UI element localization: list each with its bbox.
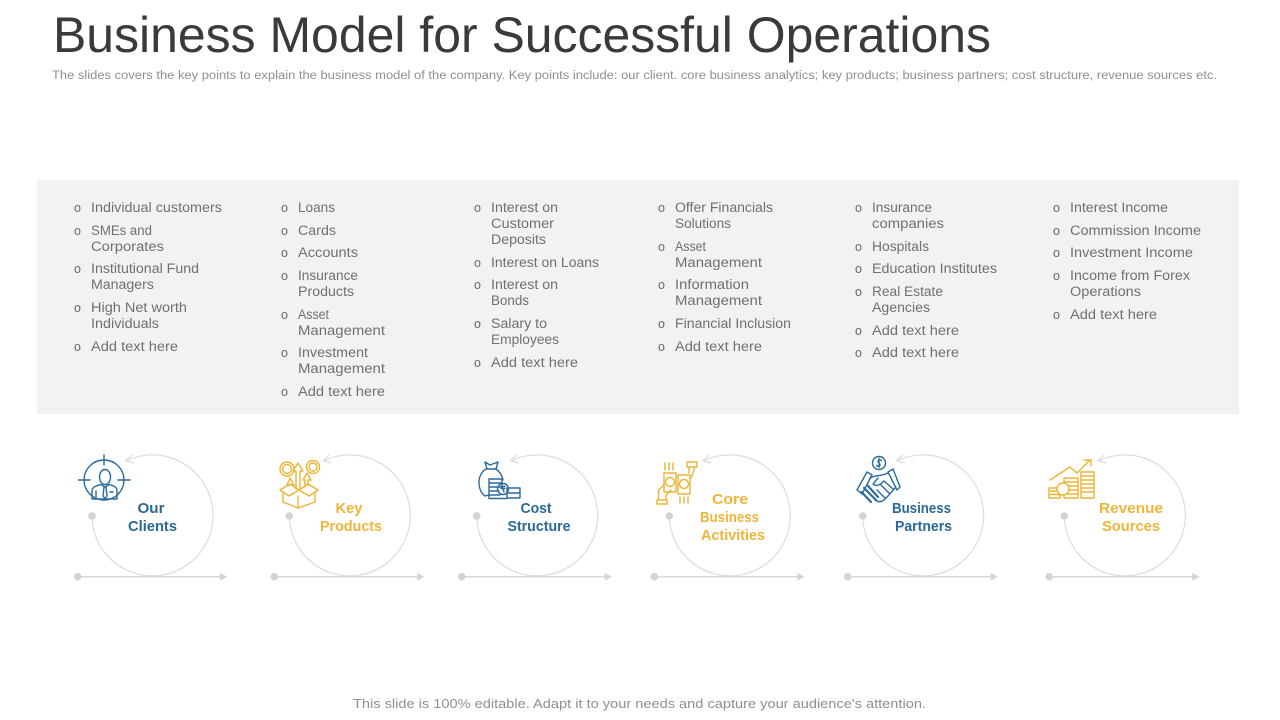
list: our clients: [74, 200, 222, 354]
label: Sources: [1102, 518, 1160, 535]
list: key products: Insurance: [298, 268, 358, 283]
list: core business activities: Management: [675, 255, 762, 270]
list: cost structure: Employees: [491, 332, 559, 347]
list: business partners: o: [855, 262, 862, 276]
list: business partners: Add text here: [872, 323, 959, 338]
list: our clients: Corporates: [91, 239, 164, 254]
list: core business activities: o: [658, 317, 665, 331]
list: key products: o: [281, 308, 288, 322]
list: our clients: SMEs and: [91, 223, 152, 238]
list: business partners: Insurance: [872, 200, 932, 215]
label: Products: [320, 518, 382, 535]
label: Clients: [128, 518, 177, 535]
list: cost structure: [474, 200, 599, 370]
list: our clients: Individual customers: [91, 200, 222, 215]
list: key products: Cards: [298, 223, 336, 238]
list: cost structure: Bonds: [491, 293, 529, 308]
list: core business activities: Information: [675, 277, 749, 292]
icon: exchange hands: [657, 462, 697, 504]
list: key products: o: [281, 246, 288, 260]
list: our clients: o: [74, 340, 81, 354]
list: revenue sources: o: [1053, 224, 1060, 238]
label: [1099, 500, 1163, 535]
step: key products: [270, 455, 424, 581]
list: core business activities: o: [658, 340, 665, 354]
list: cost structure: Add text here: [491, 355, 578, 370]
list: key products: Management: [298, 361, 385, 376]
list: business partners: o: [855, 285, 862, 299]
list: cost structure: o: [474, 201, 481, 215]
step: revenue sources: [1046, 455, 1199, 581]
list: revenue sources: o: [1053, 201, 1060, 215]
list: cost structure: Interest on Loans: [491, 255, 599, 270]
list: core business activities: o: [658, 201, 665, 215]
label: Structure: [508, 518, 570, 535]
list: revenue sources: o: [1053, 308, 1060, 322]
list: key products: o: [281, 346, 288, 360]
list: revenue sources: Investment Income: [1070, 245, 1193, 260]
label: Our: [138, 500, 165, 517]
list: business partners: Hospitals: [872, 239, 929, 254]
list: revenue sources: Income from Forex: [1070, 268, 1190, 283]
label: Key: [336, 500, 363, 517]
list: core business activities: Management: [675, 293, 762, 308]
list: our clients: o: [74, 301, 81, 315]
label: [700, 491, 765, 544]
list: cost structure: Customer: [491, 216, 555, 231]
list: key products: [281, 200, 385, 399]
label: [508, 500, 570, 535]
list: revenue sources: o: [1053, 269, 1060, 283]
list: revenue sources: Commission Income: [1070, 223, 1201, 238]
step: cost structure: [458, 455, 612, 581]
label: [320, 500, 382, 535]
list: business partners: Education Institutes: [872, 261, 997, 276]
label: Cost: [520, 500, 552, 517]
list: key products: Products: [298, 284, 354, 299]
icon: handshake: [857, 456, 900, 502]
list: cost structure: Salary to: [491, 316, 547, 331]
list: revenue sources: Add text here: [1070, 307, 1157, 322]
step: core business activities: [650, 455, 804, 581]
list: key products: Add text here: [298, 384, 385, 399]
label: Business: [700, 509, 759, 526]
list: cost structure: o: [474, 256, 481, 270]
label: Activities: [701, 527, 765, 544]
label: Revenue: [1099, 500, 1163, 517]
list: core business activities: [658, 200, 791, 354]
label: Partners: [895, 518, 952, 535]
list: business partners: o: [855, 201, 862, 215]
list: business partners: o: [855, 346, 862, 360]
list: key products: Loans: [298, 200, 335, 215]
list: cost structure: Interest on: [491, 200, 558, 215]
list: business partners: Add text here: [872, 345, 959, 360]
list: key products: o: [281, 224, 288, 238]
list: key products: Investment: [298, 345, 368, 360]
label: Core: [712, 491, 748, 508]
list: revenue sources: Operations: [1070, 284, 1141, 299]
list: key products: Asset: [298, 307, 329, 322]
list: our clients: Institutional Fund: [91, 261, 199, 276]
list: cost structure: Interest on: [491, 277, 558, 292]
step: our clients: [74, 455, 227, 581]
label: [128, 500, 177, 535]
list: our clients: o: [74, 262, 81, 276]
list: business partners: Agencies: [872, 300, 930, 315]
list: core business activities: Asset: [675, 239, 706, 254]
label: Business: [892, 500, 951, 517]
list: core business activities: Offer Financials: [675, 200, 773, 215]
list: our clients: High Net worth: [91, 300, 187, 315]
list: our clients: o: [74, 201, 81, 215]
list: revenue sources: Interest Income: [1070, 200, 1168, 215]
footer note: This slide is 100% editable. Adapt it to your needs and capture your audience's attention.: [353, 697, 926, 711]
subtitle: The slides covers the key points to explain the business model of the company. Key points include: our client. core business analytics; key products; business partners; cost structure, revenue sources etc.: [52, 70, 1217, 82]
step: business partners: [844, 455, 998, 581]
list: our clients: Add text here: [91, 339, 178, 354]
list: key products: o: [281, 385, 288, 399]
list: business partners: Real Estate: [872, 284, 943, 299]
list: cost structure: Deposits: [491, 232, 546, 247]
icon: money bag: [479, 462, 520, 498]
list: business partners: [855, 200, 997, 360]
list: core business activities: Financial Inclusion: [675, 316, 791, 331]
list: our clients: Managers: [91, 277, 154, 292]
icon: revenue growth: [1049, 460, 1094, 498]
list: key products: o: [281, 269, 288, 283]
list: cost structure: o: [474, 317, 481, 331]
list: core business activities: o: [658, 240, 665, 254]
list: core business activities: o: [658, 278, 665, 292]
list: our clients: Individuals: [91, 316, 159, 331]
list: business partners: companies: [872, 216, 944, 231]
list: key products: Accounts: [298, 245, 358, 260]
label: [892, 500, 952, 535]
list: revenue sources: o: [1053, 246, 1060, 260]
icon: client target: [78, 455, 130, 500]
list: key products: Management: [298, 323, 385, 338]
list: business partners: o: [855, 324, 862, 338]
panel: details: [37, 180, 1239, 414]
list: core business activities: Add text here: [675, 339, 762, 354]
title: Business Model for Successful Operations: [53, 7, 991, 63]
list: key products: o: [281, 201, 288, 215]
list: cost structure: o: [474, 278, 481, 292]
list: revenue sources: [1053, 200, 1201, 322]
list: core business activities: Solutions: [675, 216, 731, 231]
icon: product box: [280, 460, 320, 508]
list: our clients: o: [74, 224, 81, 238]
list: business partners: o: [855, 240, 862, 254]
list: cost structure: o: [474, 356, 481, 370]
